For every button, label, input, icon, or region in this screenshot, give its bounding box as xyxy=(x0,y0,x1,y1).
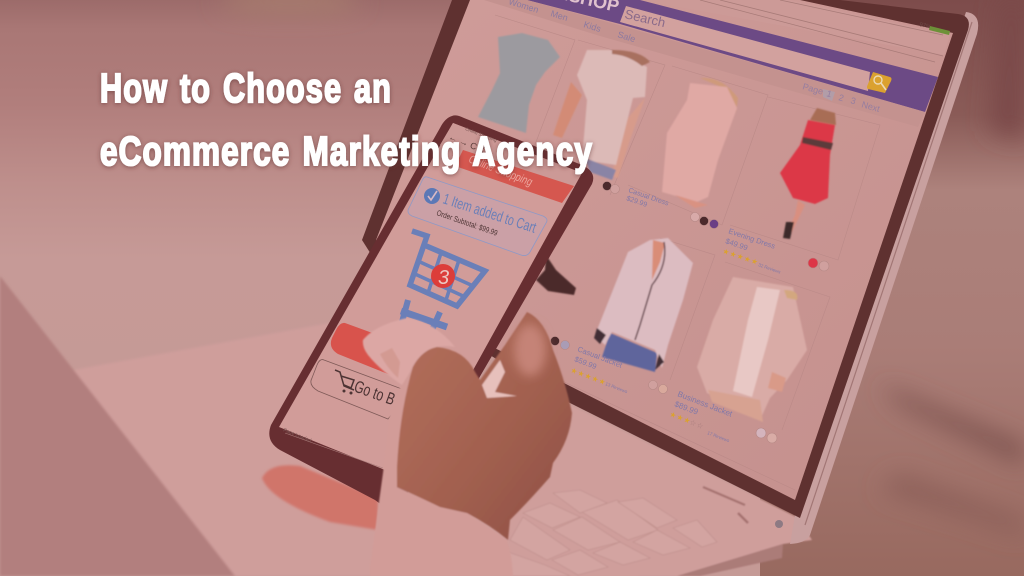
pagination: 1 xyxy=(825,88,833,99)
star ratings: ☆☆ xyxy=(688,417,706,431)
star ratings: ★★★★★ xyxy=(569,365,608,387)
product captions, prices, reviews: 32 Reviews xyxy=(758,262,782,275)
browser toolbar: Online Shopping xyxy=(465,126,498,143)
nav links: Kids xyxy=(582,19,603,34)
shoes of figure behind the phone xyxy=(536,255,576,295)
cart confirmation box xyxy=(408,177,547,256)
shopping cart icon with badge xyxy=(401,231,485,330)
go to basket button xyxy=(311,360,410,419)
cart confirmation box: 1 Item added to Cart xyxy=(441,191,539,237)
go to basket button: Go to B xyxy=(352,377,398,409)
fingertip highlight xyxy=(514,324,546,376)
laptop camera xyxy=(775,520,783,528)
product captions, prices, reviews: $89.99 xyxy=(673,399,700,417)
product: teal dress xyxy=(478,33,560,133)
laptop base and keyboard xyxy=(480,400,812,576)
laptop bezel xyxy=(362,0,969,518)
title line 1: How to Choose an xyxy=(100,65,392,111)
pagination: Next xyxy=(860,99,881,114)
product captions, prices, reviews xyxy=(573,187,782,444)
pagination: 2 xyxy=(837,92,845,103)
product captions, prices, reviews: 17 Reviews xyxy=(707,430,731,444)
colour swatches xyxy=(550,182,829,443)
nav links: Men xyxy=(549,8,569,23)
search box xyxy=(620,6,870,91)
pagination xyxy=(801,81,881,114)
product captions, prices, reviews: Casual Jacket xyxy=(576,344,624,370)
keyboard keys xyxy=(508,490,717,576)
product: red evening dress xyxy=(780,108,836,239)
product grid outlines xyxy=(495,15,880,490)
product: business jacket xyxy=(697,277,807,422)
pagination: Page xyxy=(801,81,824,97)
wrist xyxy=(370,367,513,576)
desk surface and paper xyxy=(0,276,640,576)
status text at bottom of phone: Page Loaded xyxy=(282,427,312,444)
status bar xyxy=(640,0,950,62)
nav links: Sale xyxy=(616,29,637,44)
status bar: 97% xyxy=(919,22,932,31)
pagination: 3 xyxy=(849,95,857,106)
shopping cart icon with badge: 3 xyxy=(438,267,449,289)
store header: logo, search bar xyxy=(484,0,938,127)
palm and fingers xyxy=(397,312,572,540)
phone body xyxy=(269,115,593,508)
phone screen xyxy=(279,123,582,470)
red banner: Online Shopping xyxy=(467,154,534,189)
browser toolbar xyxy=(440,123,582,186)
hand holding phone xyxy=(363,312,572,576)
phone reflection between fingers xyxy=(482,360,517,398)
star ratings xyxy=(569,246,760,431)
product captions, prices, reviews: Evening Dress xyxy=(727,226,777,251)
product captions, prices, reviews: 13 Reviews xyxy=(605,381,629,395)
title line 2: eCommerce Marketing Agency xyxy=(100,128,593,174)
browser toolbar: ← → C X xyxy=(447,132,486,155)
product captions, prices, reviews: Business Jacket xyxy=(676,389,734,419)
smartphone xyxy=(269,115,593,508)
red banner xyxy=(455,150,574,203)
star ratings: ★★★★★ xyxy=(721,246,760,267)
product captions, prices, reviews: $59.99 xyxy=(573,354,598,371)
checkout button xyxy=(331,323,400,378)
product: casual jacket and jeans xyxy=(594,238,693,372)
product: white t-shirt xyxy=(553,50,650,180)
product: pink dress xyxy=(662,78,738,208)
search button xyxy=(867,72,892,93)
nav links xyxy=(507,0,637,44)
laptop silver edge xyxy=(790,12,978,544)
reflection of phone on the surface xyxy=(262,465,378,530)
title xyxy=(100,65,593,174)
product captions, prices, reviews: $29.99 xyxy=(625,195,648,209)
cart confirmation box: Order Subtotal: $99.99 xyxy=(435,208,499,238)
store header: logo, search bar: Search xyxy=(623,6,667,30)
product captions, prices, reviews: $49.99 xyxy=(724,236,749,252)
laptop hinge xyxy=(703,487,745,505)
star ratings: ★★★ xyxy=(668,409,693,426)
thumb xyxy=(363,318,455,385)
thumb shadow xyxy=(380,348,400,378)
product captions, prices, reviews: Casual Dress xyxy=(627,187,670,208)
laptop screen xyxy=(376,0,953,500)
